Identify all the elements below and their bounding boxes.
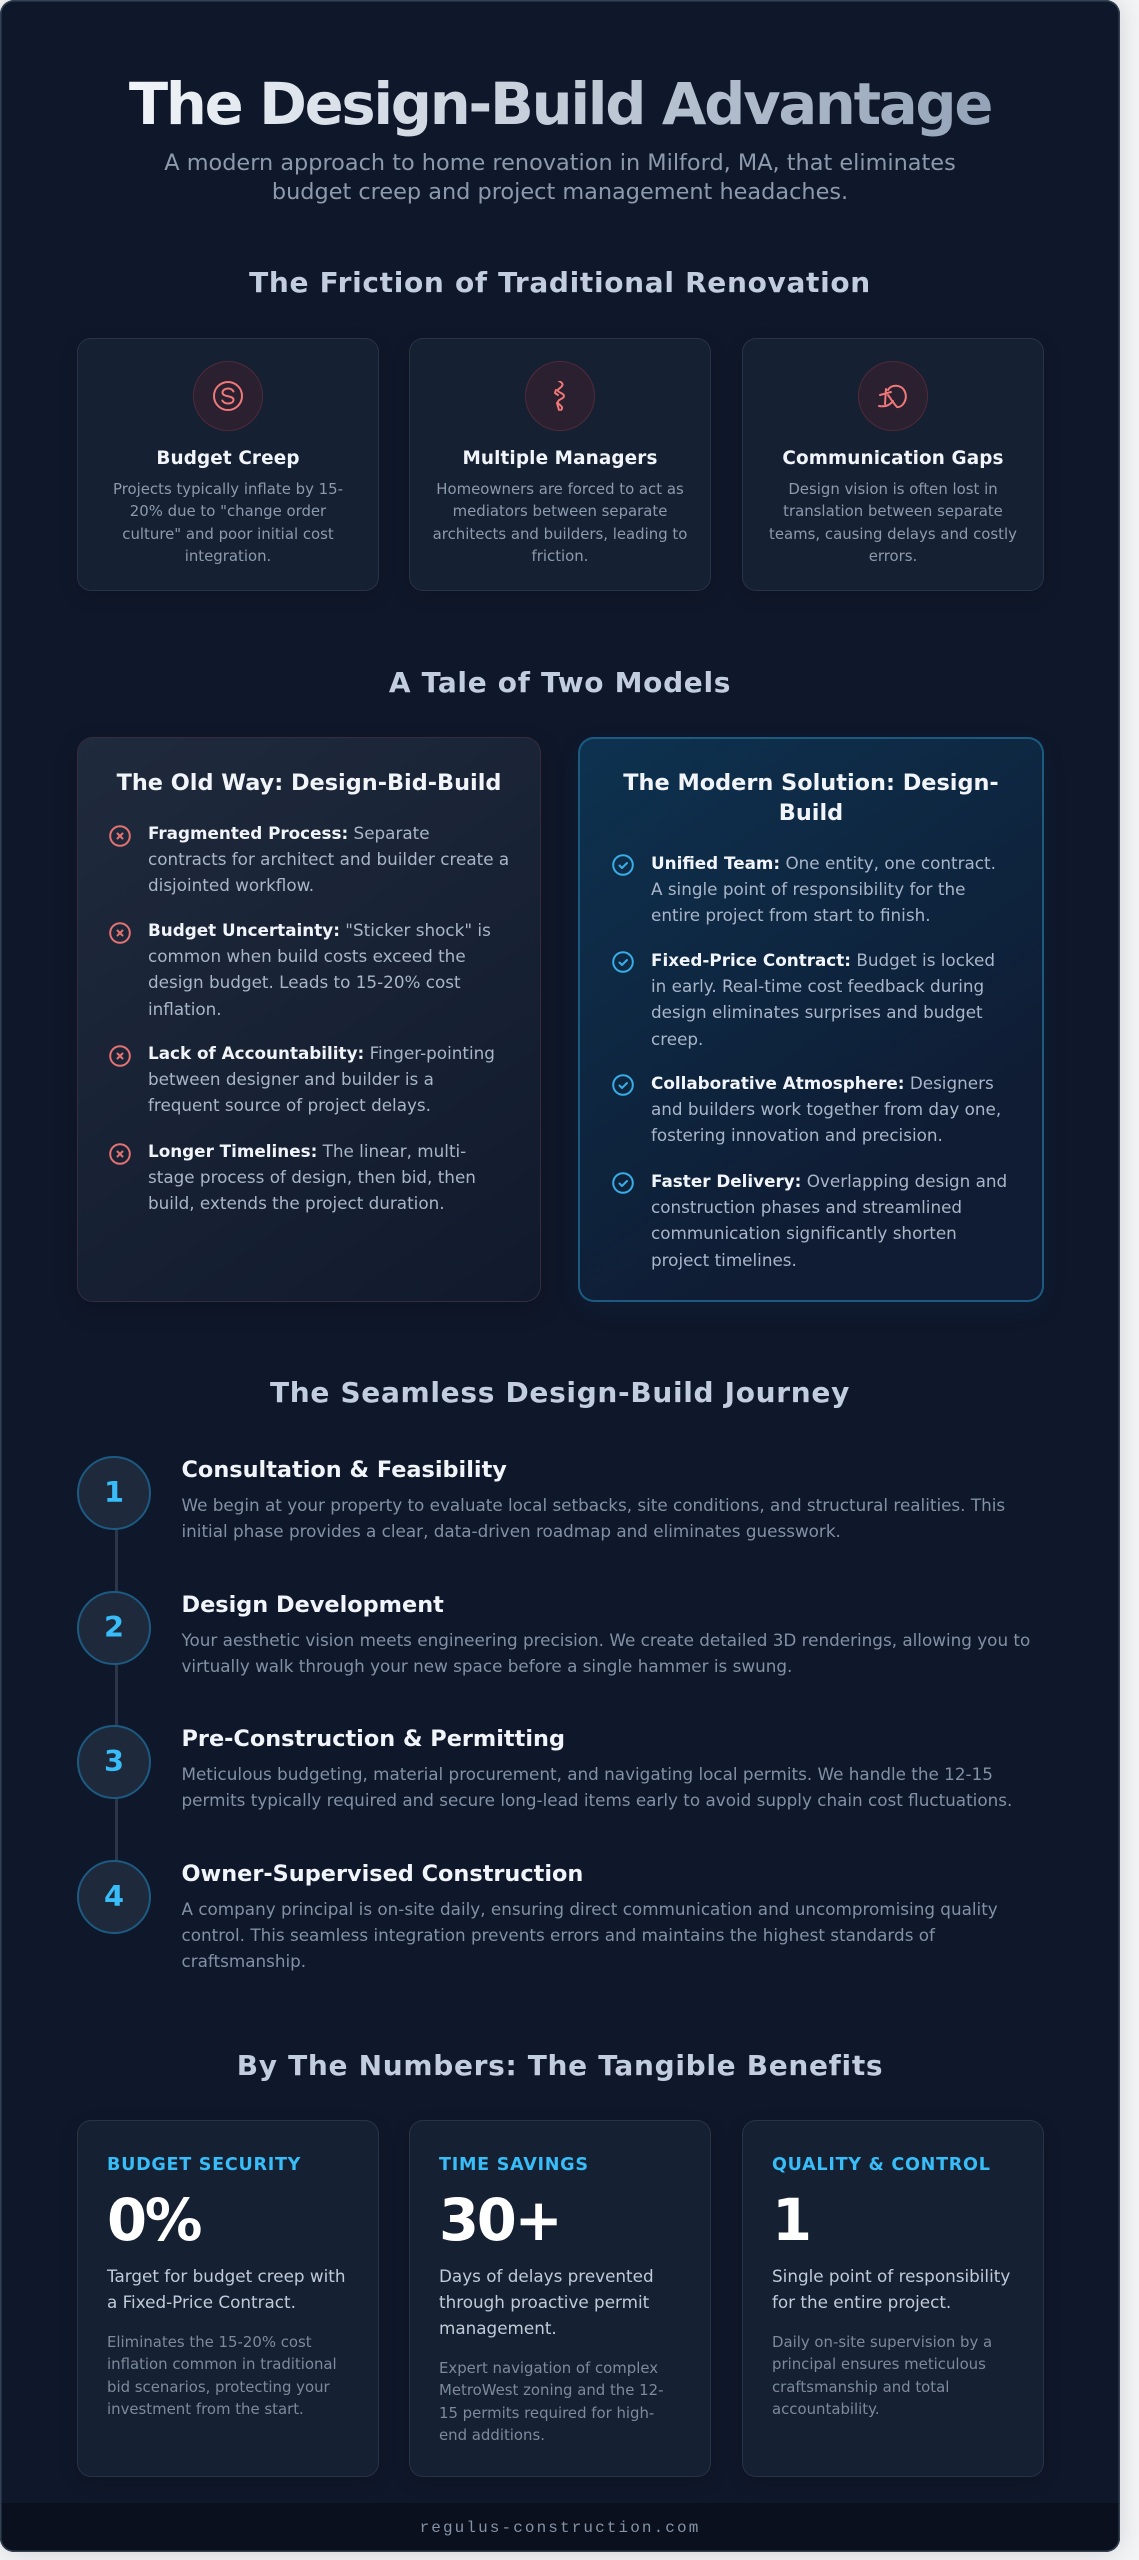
step number: 2 [104, 1610, 124, 1644]
card text [769, 480, 1017, 565]
stat detail: principal ensures meticulous [772, 2355, 986, 2373]
step number [77, 1456, 151, 1530]
stat detail: inflation common in traditional [107, 2355, 337, 2373]
panel: budget creep [77, 338, 379, 591]
step text: Meticulous budgeting, material procurement, and navigating local permits. We handle the 12-15 [182, 1764, 993, 1784]
stat number: 1 [772, 2187, 810, 2254]
card text: architects and builders, leading to [433, 525, 687, 543]
card text: integration. [185, 547, 271, 565]
list item: fixed price: creep. [651, 1029, 703, 1049]
subtitle: budget creep and project management headaches. [272, 179, 848, 205]
step text: A company principal is on-site daily, ensuring direct communication and uncompromising quality [182, 1898, 998, 1918]
card title: Multiple Managers [462, 448, 658, 469]
stat card: quality and control [742, 2120, 1044, 2477]
panel: communication gaps [742, 338, 1044, 591]
list item: faster delivery: communication significantly shorten [651, 1223, 957, 1243]
step text: initial phase provides a clear, data-driven roadmap and eliminates guesswork. [182, 1521, 841, 1541]
list item: longer timelines: Longer Timelines: The linear, multi- [148, 1141, 466, 1161]
list item: unified team [612, 853, 996, 925]
step 4 [77, 1860, 998, 1970]
step number: 4 [104, 1878, 124, 1912]
stat detail [439, 2359, 663, 2444]
step text: control. This seamless integration prevents errors and maintains the highest standards of [182, 1924, 935, 1944]
stat description: Target for budget creep with [107, 2266, 345, 2286]
card text [433, 480, 687, 565]
panel: multiple managers [409, 338, 711, 591]
stat detail: craftsmanship and total [772, 2378, 949, 2396]
step text [182, 1495, 1005, 1541]
step number: 3 [104, 1744, 124, 1778]
card text: errors. [869, 547, 917, 565]
list item: collaborative: and builders work together from day one, [651, 1099, 1001, 1119]
panel title [623, 770, 999, 826]
stat card: time savings [409, 2120, 711, 2477]
step text: We begin at your property to evaluate local setbacks, site conditions, and structural realities. This [182, 1495, 1005, 1515]
stat detail: 15 permits required for high- [439, 2404, 654, 2422]
footer [0, 2503, 1120, 2552]
stat label: BUDGET SECURITY [107, 2155, 301, 2175]
card text: mediators between separate [453, 502, 667, 520]
step 2 [77, 1591, 1030, 1676]
stat description: Single point of responsibility [772, 2266, 1010, 2286]
step text [182, 1630, 1030, 1676]
stat description [439, 2266, 654, 2338]
stat description [106, 2266, 345, 2312]
list item: budget uncertainty: common when build costs exceed the [148, 946, 466, 966]
stat detail: accountability. [772, 2400, 880, 2418]
stat detail: MetroWest zoning and the 12- [439, 2381, 663, 2399]
list item: unified team: A single point of responsibility for the [651, 879, 965, 899]
list item: budget uncertainty: inflation. [148, 999, 222, 1019]
title: The Design-Build Advantage [129, 71, 991, 138]
stat number: 0% [107, 2187, 200, 2254]
list item: accountability [109, 1043, 495, 1115]
stat detail: Expert navigation of complex [439, 2359, 658, 2377]
panel: old way [77, 737, 541, 1302]
heading: numbers: By The Numbers: The Tangible Benefits [237, 2049, 883, 2082]
icon: dollar circle [193, 361, 263, 431]
step text [182, 1764, 1012, 1810]
list item: longer timelines [109, 1141, 476, 1213]
step number [77, 1590, 151, 1664]
list item: unified team: entire project from start to finish. [651, 905, 931, 925]
timeline connector [114, 1530, 118, 1862]
step number: 1 [104, 1475, 124, 1509]
stat description: for the entire project. [772, 2292, 951, 2312]
card text: teams, causing delays and costly [769, 525, 1017, 543]
stat detail [107, 2333, 337, 2418]
list item: longer timelines: stage process of design, then bid, then [148, 1167, 476, 1187]
list item: unified team: Unified Team: One entity, one contract. [651, 853, 996, 873]
stat label: TIME SAVINGS [439, 2155, 589, 2175]
list item: fragmented process: Fragmented Process: Separate [148, 823, 430, 843]
card text: culture" and poor initial cost [122, 525, 334, 543]
heading: journey: The Seamless Design-Build Journey [270, 1376, 850, 1409]
card title: Communication Gaps [782, 448, 1004, 469]
step text: virtually walk through your new space before a single hammer is swung. [182, 1656, 792, 1676]
step title: Owner-Supervised Construction [182, 1860, 583, 1886]
stat description: Days of delays prevented [439, 2266, 654, 2286]
stat detail: end additions. [439, 2426, 545, 2444]
step 3 [77, 1725, 1012, 1810]
list item: accountability: frequent source of project delays. [148, 1095, 431, 1115]
step text: craftsmanship. [182, 1950, 306, 1970]
stat description: through proactive permit [439, 2292, 649, 2312]
list item: fixed price: design eliminates surprises and budget [651, 1002, 983, 1022]
card text: Projects typically inflate by 15- [113, 480, 343, 498]
stat description: management. [439, 2318, 557, 2338]
card text: Design vision is often lost in [788, 480, 998, 498]
panel: modern solution [578, 737, 1044, 1302]
list item: faster delivery: construction phases and streamlined [651, 1197, 962, 1217]
list item: fragmented process: disjointed workflow. [148, 875, 314, 895]
icon: broken speech bubble [858, 361, 928, 431]
subtitle [164, 150, 956, 205]
card text: 20% due to "change order [130, 502, 326, 520]
card text: friction. [532, 547, 588, 565]
stat description: a Fixed-Price Contract. [107, 2292, 296, 2312]
list item: fixed price: in early. Real-time cost feedback during [651, 976, 984, 996]
step 1 [77, 1456, 1005, 1541]
step title: Consultation & Feasibility [182, 1457, 507, 1483]
list item: fragmented process: contracts for architect and builder create a [148, 849, 509, 869]
stat detail: Eliminates the 15-20% cost [107, 2333, 312, 2351]
list item: collaborative: Collaborative Atmosphere: Designers [651, 1073, 994, 1093]
stat label: QUALITY & CONTROL [772, 2155, 991, 2175]
panel title: The Modern Solution: Design- [623, 770, 999, 796]
step text: Your aesthetic vision meets engineering precision. We create detailed 3D renderings, allowing you to [182, 1630, 1030, 1650]
list item: budget uncertainty [109, 920, 491, 1019]
stat detail: investment from the start. [107, 2400, 304, 2418]
card text: Homeowners are forced to act as [436, 480, 684, 498]
list item: faster delivery: Faster Delivery: Overlapping design and [651, 1171, 1007, 1191]
stat detail [772, 2333, 992, 2418]
list item: collaborative [612, 1073, 1001, 1145]
step number [77, 1725, 151, 1799]
stat number: 30+ [439, 2187, 561, 2254]
list item: fragmented process [109, 823, 509, 895]
list item: accountability: Lack of Accountability: Finger-pointing [148, 1043, 495, 1063]
step title: Design Development [182, 1592, 444, 1618]
stat detail: bid scenarios, protecting your [107, 2378, 330, 2396]
step text: permits typically required and secure long-lead items early to avoid supply chain cost fluctuations. [182, 1790, 1012, 1810]
list item: budget uncertainty: Budget Uncertainty: "Sticker shock" is [148, 920, 491, 940]
list item: fixed price [612, 950, 995, 1049]
card text: translation between separate [783, 502, 1003, 520]
step number [77, 1860, 151, 1934]
panel title: Build [779, 800, 843, 826]
icon: squiggle [525, 361, 595, 431]
heading: two models: A Tale of Two Models [389, 666, 731, 699]
stat detail: Daily on-site supervision by a [772, 2333, 992, 2351]
stat description [772, 2266, 1010, 2312]
list item: budget uncertainty: design budget. Leads to 15-20% cost [148, 972, 461, 992]
heading: friction: The Friction of Traditional Renovation [249, 266, 871, 299]
list item: fixed price: Fixed-Price Contract: Budget is locked [651, 950, 995, 970]
list item: longer timelines: build, extends the project duration. [148, 1193, 445, 1213]
step title: Pre-Construction & Permitting [182, 1726, 565, 1752]
step text [182, 1898, 998, 1970]
list item: collaborative: fostering innovation and precision. [651, 1125, 943, 1145]
list item: faster delivery: project timelines. [651, 1250, 797, 1270]
panel title: The Old Way: Design-Bid-Build [117, 770, 501, 796]
subtitle: A modern approach to home renovation in Milford, MA, that eliminates [164, 150, 956, 176]
stat card: budget security [77, 2120, 379, 2477]
card text [113, 480, 343, 565]
list item: accountability: between designer and builder is a [148, 1069, 434, 1089]
footer url: regulus-construction.com [420, 2519, 700, 2537]
list item: faster delivery [612, 1171, 1007, 1270]
card title: Budget Creep [156, 448, 300, 469]
